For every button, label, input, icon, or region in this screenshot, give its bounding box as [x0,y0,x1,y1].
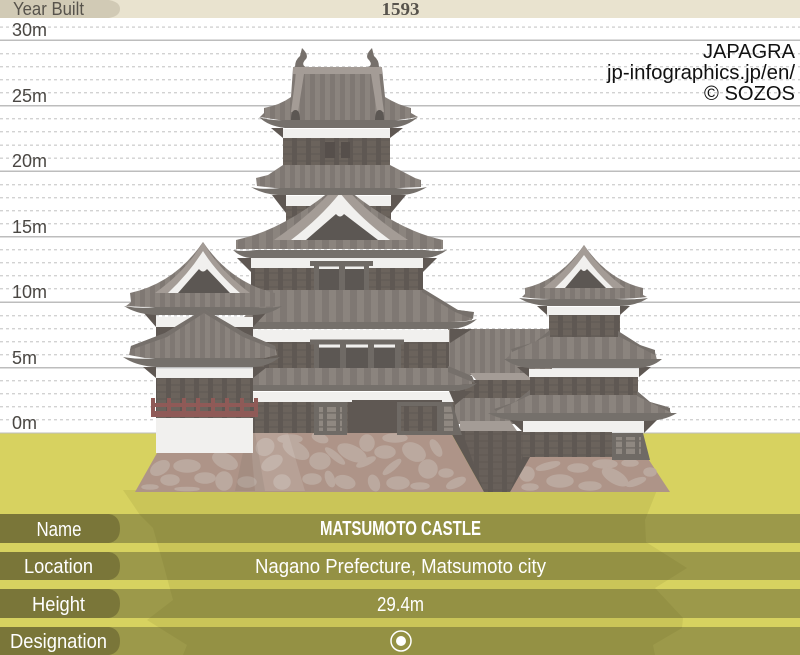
height scale labels: 15m [12,217,47,237]
credit text: jp-infographics.jp/en/ [606,62,795,84]
left tower: wall [143,312,267,418]
main keep: fourth level wall [251,258,423,290]
icon: designation circle mark [391,631,411,651]
main keep: middle roof [240,288,477,343]
main keep: top roof [259,67,418,128]
row: designation: Designation [10,631,107,653]
right tower [488,245,677,460]
left tower: red railing [151,398,258,417]
left tower: gable [155,242,250,293]
row: name: Name [36,519,82,541]
height scale labels: 30m [12,20,47,40]
height scale labels: 5m [12,348,37,368]
row: height [0,589,424,618]
left tower: upper roof [124,242,282,315]
main keep: lower wall [253,392,462,435]
height scale labels: 25m [12,86,47,106]
row: location: Nagano Prefecture, Matsumoto city [255,556,546,578]
height scale labels: 0m [12,413,37,433]
row: name: MATSUMOTO CASTLE [320,518,481,540]
main keep: lower roof [253,366,477,405]
main keep: top wall [271,128,403,165]
credit text: JAPAGRA [703,41,796,63]
row: name [0,514,481,543]
main keep: third roof [251,165,427,195]
main keep [233,48,477,435]
row: location [0,552,546,580]
credit text [606,41,796,105]
right tower: middle roof [504,330,662,368]
left tower: white base [156,418,253,453]
info row bars [0,514,800,655]
main keep: roof ornaments [295,48,379,67]
main keep: third level wall [272,195,406,236]
main keep: fifth level wall [253,330,449,370]
height scale labels: 20m [12,151,47,171]
row: designation [0,627,411,655]
scale grid lines [0,26,800,434]
castle illustration [123,48,677,492]
left tower: lower roof [123,309,280,367]
right tower: entrance panel [612,433,650,460]
right tower: lower roof [488,390,677,421]
right tower: gable [543,245,625,288]
castle reflection shadow [123,490,687,655]
row: location: Location [24,556,93,578]
left tower [123,242,282,453]
stone base [135,432,670,492]
row: height: Height [32,594,85,616]
height scale labels [12,20,47,433]
connecting wing [448,329,552,492]
height scale labels: 10m [12,282,47,302]
right tower: top roof [519,245,648,306]
right tower: walls [510,306,657,457]
main keep: front gable [274,181,408,240]
main keep: gable roof [233,183,447,272]
row: height: 29.4m [377,594,424,616]
year built bar [0,0,800,19]
credit text: © SOZOS [704,83,795,105]
ground [0,434,800,655]
